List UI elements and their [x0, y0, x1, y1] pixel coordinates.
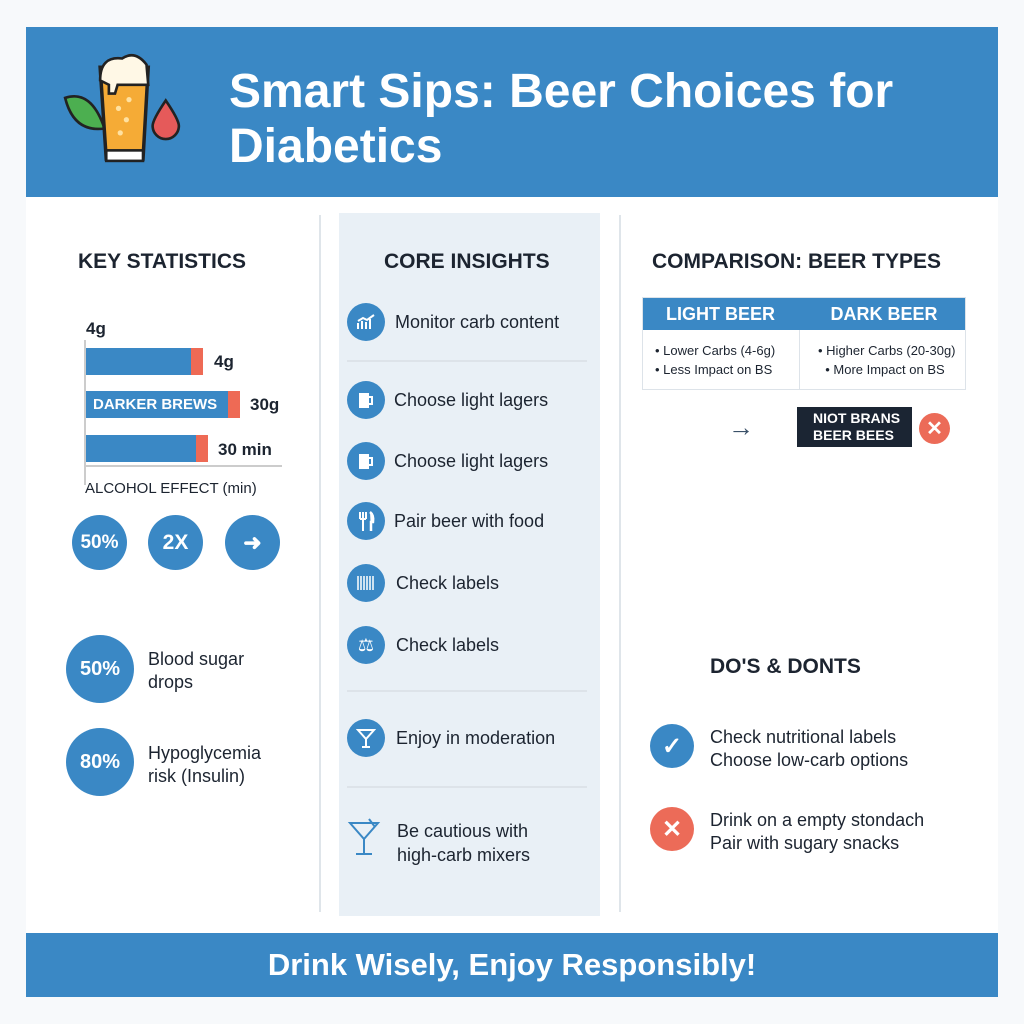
do item: Choose low-carb options	[710, 750, 908, 770]
stat: blood sugar: 50%	[80, 658, 120, 680]
item: moderation	[347, 719, 555, 757]
stat circles	[72, 515, 280, 570]
item: mixers: high-carb mixers	[397, 845, 530, 865]
stat circles: ➜	[243, 530, 262, 554]
footer	[26, 933, 998, 997]
do item: Check nutritional labels	[710, 727, 896, 747]
label: not brands: BEER BEES	[813, 427, 894, 443]
panel: comparison	[642, 250, 966, 447]
title: Smart Sips: Beer Choices for Diabetics	[229, 65, 893, 173]
stat: hypoglycemia: 80%	[80, 750, 120, 772]
bar chart: 4g	[214, 352, 234, 371]
icon: beer glass	[64, 54, 180, 162]
dont item: Pair with sugary snacks	[710, 833, 899, 853]
item: check labels 1	[347, 564, 499, 602]
comparison table: • Lower Carbs (4-6g)	[655, 343, 775, 358]
header	[26, 27, 998, 197]
item: pair food	[347, 502, 544, 540]
item: check labels 2: ⚖	[358, 634, 374, 654]
dont item	[650, 807, 924, 853]
stat: hypoglycemia	[66, 728, 261, 796]
bar chart: 30g	[250, 395, 279, 414]
heading: comparison: COMPARISON: BEER TYPES	[652, 250, 941, 273]
item: mixers: Be cautious with	[397, 821, 528, 841]
item: check labels 2: Check labels	[396, 635, 499, 655]
stat: blood sugar: Blood sugar	[148, 649, 244, 669]
item: monitor carb	[347, 303, 559, 341]
comparison table: • Higher Carbs (20-30g)	[818, 343, 956, 358]
panel: key statistics	[66, 250, 282, 796]
bar chart	[84, 319, 282, 485]
item: light lagers 2	[347, 442, 548, 480]
comparison table	[642, 297, 966, 390]
do item	[650, 724, 908, 770]
stat: hypoglycemia: risk (Insulin)	[148, 766, 245, 786]
panel: dos and donts	[650, 655, 924, 853]
item: check labels 2	[347, 626, 499, 664]
footer: Drink Wisely, Enjoy Responsibly!	[268, 947, 756, 982]
icon: x: ✕	[926, 418, 943, 440]
dont item: ✕	[662, 816, 682, 842]
stat circles: 2X	[163, 530, 188, 554]
decorative dividers	[319, 215, 321, 912]
stat: blood sugar: drops	[148, 672, 193, 692]
comparison table: DARK BEER	[830, 304, 938, 324]
heading: key statistics: KEY STATISTICS	[78, 250, 246, 273]
item: light lagers 1: Choose light lagers	[394, 390, 548, 410]
label: not brands: NIOT BRANS	[813, 410, 900, 426]
bar chart: DARKER BREWS	[93, 396, 217, 413]
panel: key statistics: ALCOHOL EFFECT (min)	[85, 480, 257, 497]
comparison table: • Less Impact on BS	[655, 362, 772, 377]
item: moderation: Enjoy in moderation	[396, 728, 555, 748]
icon: x	[919, 413, 950, 444]
comparison table: LIGHT BEER	[666, 304, 775, 324]
arrow: →	[728, 412, 754, 442]
item: monitor carb: Monitor carb content	[395, 312, 559, 332]
bar chart: 4g	[86, 319, 106, 338]
item: mixers	[348, 818, 530, 865]
bar chart: 30 min	[218, 440, 272, 459]
stat: hypoglycemia: Hypoglycemia	[148, 743, 261, 763]
item: pair food: Pair beer with food	[394, 511, 544, 531]
heading: dos: DO'S & DONTS	[710, 655, 861, 678]
stat circles: 50%	[80, 532, 119, 552]
item: light lagers 1	[347, 381, 548, 419]
dont item: Drink on a empty stondach	[710, 810, 924, 830]
panel: core insights	[339, 213, 600, 916]
item: check labels 1: Check labels	[396, 573, 499, 593]
label: not brands	[797, 407, 912, 447]
item: light lagers 2: Choose light lagers	[394, 451, 548, 471]
stat: blood sugar	[66, 635, 244, 703]
do item: ✓	[662, 732, 682, 760]
heading: core insights: CORE INSIGHTS	[384, 250, 550, 273]
comparison table: • More Impact on BS	[825, 362, 945, 377]
